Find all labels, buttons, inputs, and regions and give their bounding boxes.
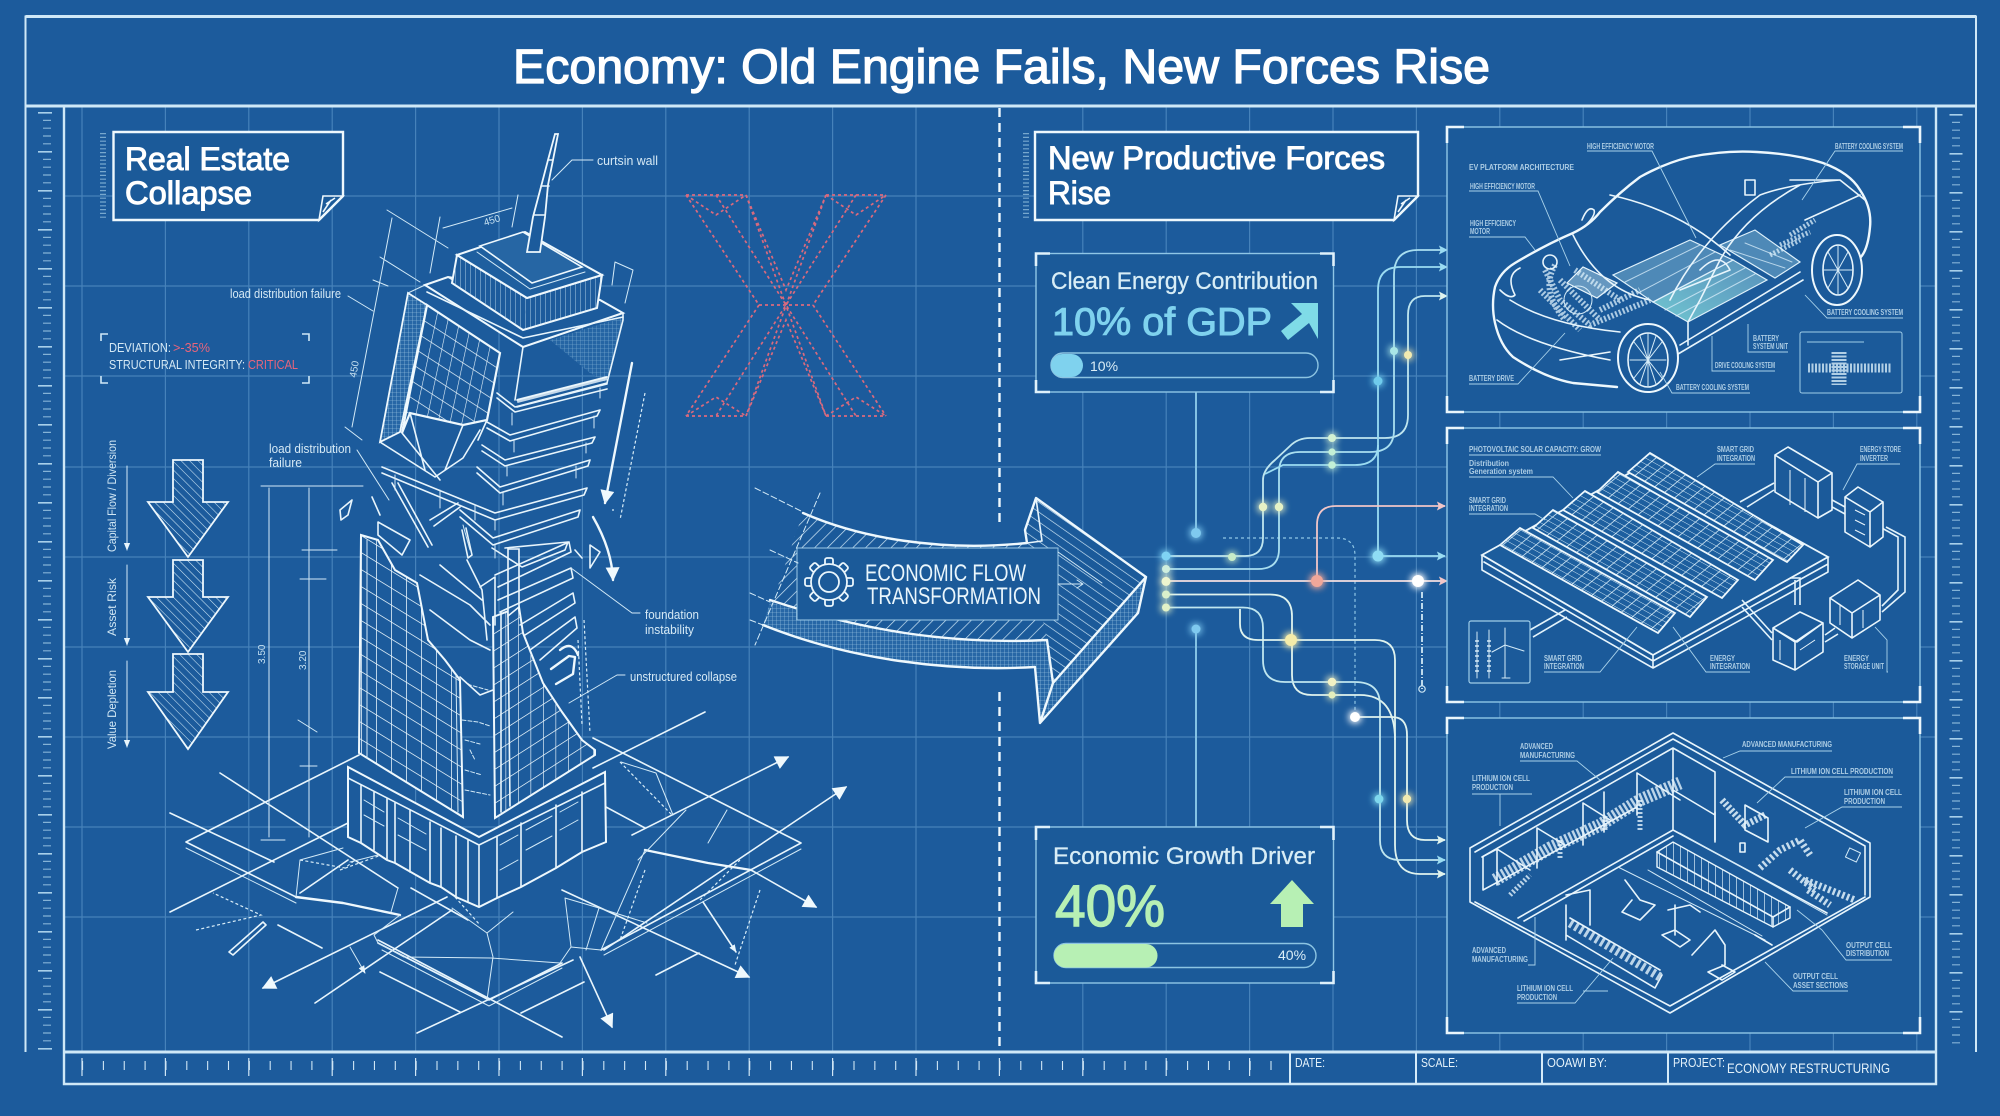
callout: structural deviation: CRITICAL [248,357,298,372]
factory callout labels [1472,740,1902,1003]
solar callout labels: SMART GRID [1544,654,1582,663]
tower top cap [452,232,602,330]
factory callout labels: DISTRIBUTION [1846,949,1889,958]
downward capital flow arrows [105,440,228,749]
factory callout labels: PRODUCTION [1472,783,1513,792]
EV callout labels: HIGH EFFICIENCY [1470,219,1516,228]
EV callout labels: HIGH EFFICIENCY MOTOR [1470,182,1535,191]
solar callout labels: INVERTER [1860,454,1888,463]
factory callout labels: PRODUCTION [1844,797,1885,806]
solar callout labels: ENERGY [1844,654,1869,663]
panel: advanced manufacturing [1447,718,1920,1033]
tower podium [348,767,606,907]
wide slab under cap [425,277,623,347]
rear wheel [1812,235,1862,305]
factory callout labels: ADVANCED [1472,946,1506,955]
blueprint grid [64,106,1936,1052]
lower tower left face [359,535,463,817]
EV callout labels: BATTERY DRIVE [1469,374,1514,383]
factory callout labels: ASSET SECTIONS [1793,981,1849,990]
dotted guide [1223,538,1355,717]
lower tower right face [462,549,595,818]
factory callout labels: PRODUCTION [1517,993,1557,1002]
tower labels: load distribution [269,441,351,456]
factory shell [1470,733,1870,1013]
EV callout labels: HIGH EFFICIENCY MOTOR [1587,142,1654,151]
solar callout labels: Distribution [1469,459,1509,468]
EV callout labels [1469,142,1903,393]
factory callout labels: LITHIUM ION CELL [1844,788,1902,797]
callout: structural deviation: >-35% [173,340,210,355]
wiring between units [1530,483,1905,642]
title block: DATE: [1295,1055,1325,1070]
wind turbine inset [1469,621,1530,683]
antenna [527,134,558,252]
glowing nodes [1162,347,1424,803]
stat card: growth driver [1036,827,1334,983]
EV callout labels: BATTERY COOLING SYSTEM [1835,142,1903,151]
solar base platform [1482,460,1828,668]
factory callout labels: ADVANCED MANUFACTURING [1742,740,1832,749]
collapsing tower [230,134,737,907]
title block: PROJECT: [1673,1055,1725,1070]
arrow label [750,488,1102,645]
stat card: growth driver: 40% [1055,874,1165,939]
lower routes [1166,594,1445,874]
solar callout labels: INTEGRATION [1717,454,1755,463]
tower labels: instability [645,622,694,637]
mid floors, right side [420,542,577,695]
solar callout labels: Generation system [1469,467,1533,476]
factory callout labels: MANUFACTURING [1472,955,1528,964]
heading: New Productive Forces Rise [1026,132,1418,220]
EV callout labels: BATTERY COOLING SYSTEM [1676,383,1749,392]
solar callout labels: INTEGRATION [1544,662,1584,671]
EV callout labels: SYSTEM UNIT [1753,342,1788,351]
panel: EV platform [1447,127,1920,412]
tower labels: load distribution failure [230,286,341,301]
ground plate with cracks [170,712,846,1037]
solar callout labels [1469,445,1901,672]
floor slabs [382,383,607,567]
stat card: growth driver: Economic Growth Driver [1053,843,1315,870]
icon: up arrow [1270,880,1314,927]
title block: SCALE: [1421,1055,1458,1070]
panel: solar and smart grid [1447,428,1920,702]
downward capital flow arrows: Capital Flow / Diversion [105,440,119,552]
EV callout labels: BATTERY COOLING SYSTEM [1827,308,1903,317]
callout: structural deviation [101,334,309,383]
progress bar 10%: 10% [1090,358,1118,374]
title block: OOAWI BY: [1547,1055,1607,1070]
heading: New Productive Forces Rise: New Productive Forces [1048,140,1385,176]
arrow label: ECONOMIC FLOW [865,560,1026,587]
left ruler [45,112,47,1050]
tower labels: 450 [483,213,502,229]
title block [1290,1052,1890,1084]
factory callout labels: ADVANCED [1520,742,1553,751]
EV callout labels: MOTOR [1470,227,1490,236]
debris and dimension lines [261,160,645,840]
right ruler [1952,114,1960,1050]
solar callout labels: ENERGY [1710,654,1735,663]
EV callout labels: DRIVE COOLING SYSTEM [1715,361,1775,370]
equipment cabinets [1773,447,1883,670]
progress bar 10% [1051,353,1318,378]
factory callout labels: LITHIUM ION CELL PRODUCTION [1791,767,1893,776]
upper wall, right mesh [515,313,623,407]
tower labels: 3.50 [257,644,268,664]
heading: Real Estate Collapse: Collapse [125,175,252,211]
front wheel [1618,324,1678,392]
arrow label: TRANSFORMATION [867,583,1041,610]
heading: Real Estate Collapse: Real Estate [125,141,290,177]
solar callout labels: SMART GRID [1469,496,1506,505]
solar callout labels: INTEGRATION [1710,662,1750,671]
callout: structural deviation: STRUCTURAL INTEGRITY: [109,357,245,372]
tilted curtain wall [380,285,500,480]
title block: ECONOMY RESTRUCTURING [1727,1060,1890,1076]
center divider [998,108,1001,1050]
solar callout labels: PHOTOVOLTAIC SOLAR CAPACITY: GROW [1469,445,1601,454]
motor and drivetrain [1540,265,1650,330]
red X failure mark [686,195,886,416]
downward capital flow arrows: Value Depletion [105,670,119,749]
inset component detail [1800,332,1902,393]
progress bar 40%: 40% [1278,947,1306,963]
tower labels: curtsin wall [597,153,658,168]
callout: structural deviation: DEVIATION: [109,340,171,355]
transformation arrow [750,488,1146,723]
icon: gear [805,558,853,606]
heading: Real Estate Collapse [103,132,343,220]
solar callout labels: INTEGRATION [1469,504,1508,513]
tower labels [230,153,737,684]
factory callout labels: MANUFACTURING [1520,751,1575,760]
center route [1166,506,1447,692]
solar callout labels: ENERGY STORE [1860,445,1901,454]
upper routes [1166,250,1447,569]
heading: New Productive Forces Rise: Rise [1048,175,1111,211]
factory callout labels: LITHIUM ION CELL [1472,774,1530,783]
factory callout labels: OUTPUT CELL [1846,941,1892,950]
EV callout labels: EV PLATFORM ARCHITECTURE [1469,163,1575,172]
solar callout labels: SMART GRID [1717,445,1754,454]
progress bar 40% [1054,944,1316,968]
solar callout labels: STORAGE UNIT [1844,662,1884,671]
factory callout labels: OUTPUT CELL [1793,972,1838,981]
tower labels: unstructured collapse [630,669,737,684]
stat card: clean energy: Clean Energy Contribution [1051,268,1318,295]
EV callout labels: BATTERY [1753,334,1779,343]
tower labels: 450 [348,360,362,379]
title: Economy: Old Engine Fails, New Forces Rise [513,41,1490,94]
connector stems [1195,392,1197,827]
car illustration [1493,152,1870,392]
tower labels: 3.20 [298,650,309,670]
circuit flow lines [1166,250,1447,874]
tower labels: foundation [645,607,699,622]
slab edge [427,277,623,338]
tower labels: failure [269,455,302,470]
icon: up-right arrow [1281,303,1318,340]
stat card: clean energy: 10% of GDP [1052,301,1272,344]
stat card: clean energy [1036,254,1334,392]
solar array rows [1500,453,1803,633]
bottom ruler [82,1058,1290,1076]
assembly line, battery rack and robots [1495,783,1861,988]
downward capital flow arrows: Asset Risk [105,577,119,636]
factory callout labels: LITHIUM ION CELL [1517,984,1573,993]
